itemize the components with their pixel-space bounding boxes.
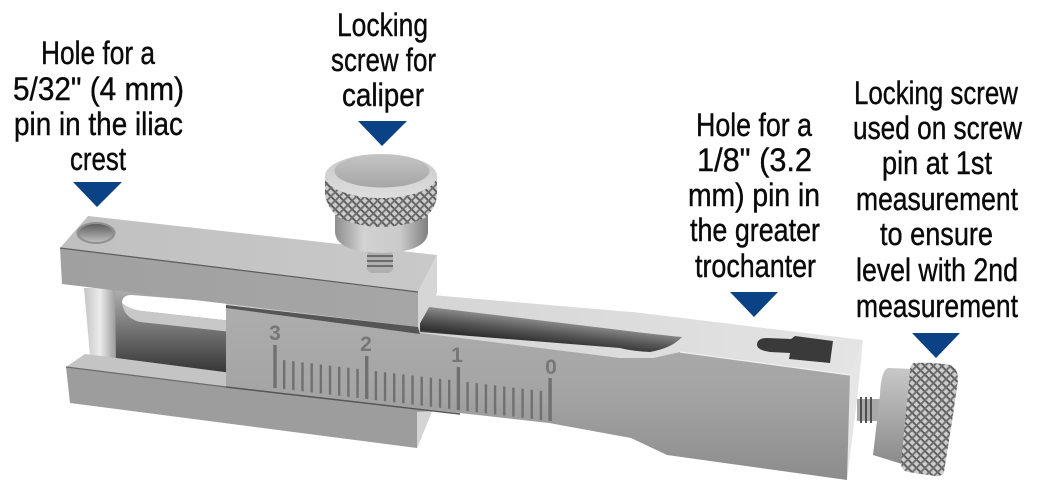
thumb screw: screw pin xyxy=(857,363,958,476)
thumb screw: caliper xyxy=(325,154,437,273)
upper arm xyxy=(60,216,437,334)
arrow: greater trochanter hole xyxy=(730,292,778,317)
scale numbers xyxy=(269,322,557,379)
illustration: caliper instrument xyxy=(60,154,958,480)
label: locking screw on screw pin: to ensure xyxy=(880,216,993,252)
bar end face xyxy=(847,340,863,480)
label: caliper locking screw: screw for xyxy=(331,42,436,78)
scale ticks xyxy=(275,345,550,421)
label: greater trochanter hole: trochanter xyxy=(695,248,816,284)
label: iliac crest hole: crest xyxy=(70,141,126,177)
pin hole: iliac crest xyxy=(76,222,116,244)
label: greater trochanter hole: the greater xyxy=(690,212,820,248)
label: caliper locking screw: Locking xyxy=(337,7,428,43)
scale numbers: 0 xyxy=(545,356,557,379)
label: iliac crest hole: Hole for a xyxy=(41,35,155,71)
label: iliac crest hole: pin in the iliac xyxy=(14,106,183,142)
label: locking screw on screw pin: pin at 1st xyxy=(882,145,992,181)
label: caliper locking screw xyxy=(331,7,436,113)
arrow: locking screw on screw pin xyxy=(912,333,960,358)
scale numbers: 3 xyxy=(269,322,281,345)
sliding bar top face xyxy=(226,294,863,375)
label: greater trochanter hole: mm) pin in xyxy=(688,177,820,213)
label: iliac crest hole: 5/32" (4 mm) xyxy=(13,71,184,107)
arrow: iliac crest hole xyxy=(73,182,122,207)
label: locking screw on screw pin xyxy=(853,75,1023,324)
yoke back wall xyxy=(84,288,232,378)
label: greater trochanter hole xyxy=(688,107,820,284)
arrow: caliper locking screw xyxy=(358,121,407,146)
lower arm xyxy=(66,354,432,448)
label: iliac crest hole xyxy=(13,35,184,177)
label: greater trochanter hole: Hole for a xyxy=(696,107,812,143)
scale numbers: 2 xyxy=(360,333,372,356)
label: caliper locking screw: caliper xyxy=(342,77,424,113)
scale numbers: 1 xyxy=(451,344,463,367)
sliding bar front face with scale xyxy=(226,307,850,480)
pin hole: greater trochanter xyxy=(757,336,833,363)
label: greater trochanter hole: 1/8" (3.2 xyxy=(697,142,812,178)
